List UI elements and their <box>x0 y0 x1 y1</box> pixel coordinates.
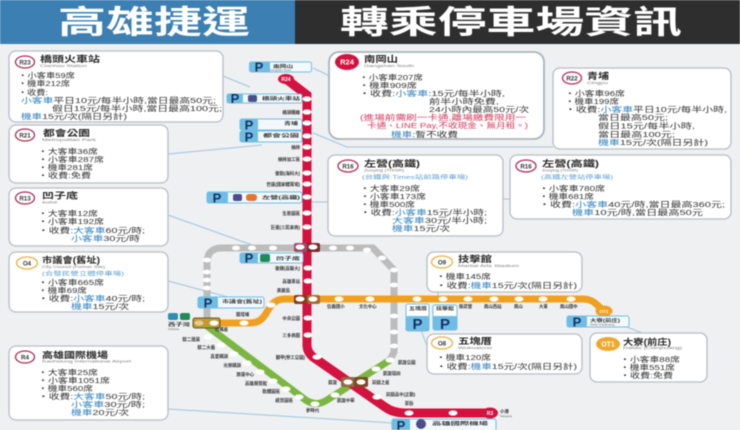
panel: OT1 大寮 <box>590 333 707 382</box>
panel: R16 左營 高鐵: (高鐵左營站停車場) <box>541 173 613 181</box>
panel: R4 高雄國際機場: ‧機車560席 <box>38 383 94 393</box>
orange line station labels: 鳳山 <box>514 303 523 310</box>
red line station labels: 前鎮高中(正勤) <box>386 391 416 398</box>
red line station labels: 三多商圈 <box>282 332 301 339</box>
panel: R23 橋頭火車站: 橋頭火車站 <box>40 53 100 64</box>
station tag: 橋頭火車站: P <box>231 91 240 106</box>
panel: O4 市議會: ‧小客車665席 <box>38 277 105 287</box>
panel: O4 市議會: 機車 15元/次 <box>71 301 130 311</box>
panel: R22 青埔: R22 <box>566 75 578 82</box>
panel: R21 都會公園: ‧收費:免費 <box>38 170 92 180</box>
panel: R23 橋頭火車站: 機車 15元/次(隔日另計) <box>21 111 128 121</box>
panel: R4 高雄國際機場: Kaohsiung International Airport <box>42 360 133 364</box>
panel: R22 青埔: Cingpu <box>587 81 608 85</box>
station tag: 左營(高鐵): P <box>213 190 222 206</box>
panel: O4 市議會: O4 <box>23 260 32 267</box>
station tag: 五塊厝 <box>406 304 429 333</box>
panel: R24 南岡山: 24小時內最高50元/次 <box>429 104 530 114</box>
panel: R16 左營 高鐵: ‧小客車780席 <box>539 183 606 193</box>
station tag: 大寮: P <box>573 314 582 330</box>
green line station labels: 凱旋瑞田 <box>383 370 401 377</box>
panel: O9 技擊館: ‧收費: 機車 15元/次(隔日另計) <box>436 280 578 290</box>
station tag: 技擊館: 技擊館 <box>436 305 455 312</box>
panel: R13 凹子底 <box>9 188 168 246</box>
panel: R24 南岡山: 機車 :暫不收費 <box>391 129 459 139</box>
panel: R16 左營 台鐵: (台鐵與:Times站前路停車場) <box>362 173 468 181</box>
panel: R22 青埔: 當日最高50元; <box>598 112 668 122</box>
station tag: 市議會: 市議會(舊址) <box>222 298 263 305</box>
panel: O9 技擊館 <box>427 252 582 292</box>
panel: R16 左營 台鐵: ‧小客車173席 <box>360 191 427 201</box>
green line station labels: 夢時代 <box>306 407 320 414</box>
orange line station labels: 大東 <box>539 303 548 310</box>
orange line station labels: 哈瑪星 <box>215 326 229 333</box>
panel: R16 左營 台鐵: 機車 15元/次 <box>392 223 451 233</box>
panel: R22 青埔: ‧機車199席 <box>565 96 620 106</box>
green circular line <box>203 323 390 404</box>
grey circular line <box>207 248 394 360</box>
red line station labels: 後勁(海科大) <box>275 170 301 177</box>
panel: R16 左營 台鐵: 左營(高鐵) <box>364 158 420 168</box>
station tag: 市議會 <box>198 296 264 310</box>
panel: R4 高雄國際機場: ‧收費: 大客車 50元/時; <box>38 391 145 401</box>
header: dark title band <box>295 0 740 44</box>
station tag: 大寮: 大寮(前庄) <box>590 317 621 324</box>
panel: OT1 大寮: 大寮(前庄) <box>623 336 671 347</box>
panel: R4 高雄國際機場: ‧大客車25席 <box>38 367 99 377</box>
station tag: 五塊厝: P <box>412 316 423 333</box>
orange line station labels: 鹽埕埔 <box>236 311 250 318</box>
panel: R24 南岡山: 卡通、LINE Pay,不收現金、無月租。) <box>367 120 529 130</box>
red line station labels: 中央公園 <box>282 315 301 322</box>
green line station labels: 凱旋中華 <box>337 397 355 404</box>
station tag: 大寮: Daliao (Cianjhuang) <box>590 322 615 326</box>
red line station labels <box>266 109 512 418</box>
red line station labels: Siaogang <box>500 414 512 418</box>
panel: R22 青埔: ‧收費: 小客車 平日10元/每半小時, <box>565 104 727 114</box>
icons and label: 西子灣 <box>168 313 191 331</box>
icons and label: 西子灣: Sizihwan <box>168 327 180 331</box>
red line station labels: 楠梓加工區 <box>278 156 301 163</box>
panel: R16 左營 高鐵: R16 <box>520 163 532 170</box>
panel: R23 橋頭火車站: 小客車 平日10元/每半小時,當日最高50元; <box>21 95 216 105</box>
green line station labels: 光榮碼頭 <box>223 362 242 369</box>
panel: R23 橋頭火車站: ‧收費: <box>18 87 48 97</box>
panel: R24 南岡山: R24 <box>340 58 355 66</box>
panel: OT1 大寮: ‧收費:免費 <box>620 370 674 380</box>
panel: R22 青埔: ‧小客車96席 <box>565 88 626 98</box>
red line stations: R24 <box>281 77 291 83</box>
station tag: 凹子底: 凹子底 <box>276 255 301 262</box>
red line station labels: 小港 <box>500 408 509 415</box>
station tag: 南岡山 <box>249 60 312 74</box>
panel: R16 左營 高鐵: ‧收費: 小客車 40元/時,當日最高360元; <box>539 199 725 209</box>
station tag: 技擊館: P <box>440 316 450 333</box>
panel: R16 左營 台鐵: ‧機車500席 <box>360 199 416 209</box>
green line station labels: 軟體園區 <box>262 388 281 395</box>
panel: O8 五塊厝: O8 <box>438 340 447 347</box>
green line station labels: 駁二大義 <box>197 344 216 351</box>
red line station labels: 後驛(高醫大) <box>275 265 301 272</box>
station tag: 橋頭火車站 <box>227 91 302 106</box>
orange line station labels: 信義國小 <box>327 303 345 310</box>
panel: R16 左營 高鐵: 機車 10元/時,當日最高50元 <box>572 207 704 217</box>
panel: OT1 大寮: OT1 <box>601 342 615 348</box>
panel: R13 凹子底: ‧大客車12席 <box>38 208 99 218</box>
orange line station labels: 鳳山西站 <box>484 303 502 310</box>
station tag: 大寮 <box>567 314 629 330</box>
orange line <box>203 299 604 323</box>
station tag: 凹子底: P <box>245 250 254 266</box>
panel: R21 都會公園: ‧大客車36席 <box>38 146 99 156</box>
header: blue title band: 高雄捷運 <box>58 4 250 40</box>
panel: OT1 大寮: ‧小客車88席 <box>620 354 681 364</box>
station tag: 青埔: 青埔 <box>284 120 299 127</box>
icons and label: 西子灣: 西子灣 <box>168 321 191 328</box>
interchange boxes <box>193 243 368 387</box>
red line station labels: 楠梓 <box>291 144 301 151</box>
panel: O9 技擊館: O9 <box>438 259 447 266</box>
panel: R16 左營 高鐵: Zuoying (TH/SR) <box>542 168 579 172</box>
orange line stations: OT1 <box>600 309 609 314</box>
orange line station labels: 鳳山國中 <box>560 303 578 310</box>
panel: O8 五塊厝: Wukuaicuo <box>458 346 492 350</box>
panel: O9 技擊館: ‧機車145席 <box>436 271 492 281</box>
panel: R24 南岡山: ‧小客車207席 <box>359 72 424 82</box>
panel: R23 橋頭火車站 <box>9 51 223 122</box>
panel: R16 左營 台鐵: 大客車 30元/半小時; <box>392 215 487 225</box>
orange line station labels <box>215 303 578 333</box>
grey line stations <box>203 246 398 348</box>
header: blue title band <box>0 0 295 44</box>
panel: R23 橋頭火車站: ‧機車212席 <box>18 78 70 88</box>
red line station labels: 獅甲(勞工公園) <box>276 354 306 361</box>
panel: R22 青埔 <box>553 68 731 149</box>
station tag: 南岡山: Gangshan South <box>270 68 291 72</box>
red line station labels: 世運(國家體育場) <box>266 181 301 188</box>
panel: R4 高雄國際機場: ‧小客車1051席 <box>38 375 111 385</box>
panel: R13 凹子底: ‧小客車192席 <box>38 216 105 226</box>
panel: O4 市議會: 市議會(舊址) <box>42 254 100 265</box>
green line station labels: 凱旋公園 <box>398 359 416 366</box>
panel: R16 左營 台鐵: ‧收費: 小客車 15元/半小時; <box>360 207 487 217</box>
panel: O4 市議會: ‧收費: 小客車 40元/時; <box>38 293 145 303</box>
panel: R21 都會公園: ‧小客車287席 <box>38 154 105 164</box>
station tag: 左營(高鐵): 左營(高鐵) <box>262 194 301 201</box>
station tag: 高雄國際機場 <box>392 418 496 430</box>
green line station labels <box>182 336 416 414</box>
green line station labels: 經貿園區 <box>275 397 294 404</box>
orange line station labels: 文化中心 <box>359 303 377 310</box>
red line station labels: 草衙 <box>405 400 414 407</box>
orange line stations <box>194 296 612 326</box>
panel: R4 高雄國際機場: 機車 20元/次 <box>71 407 130 417</box>
green line stations <box>204 334 394 407</box>
metro map <box>168 60 629 430</box>
green line station labels: 旅運中心 <box>236 371 255 378</box>
panel: O4 市議會: City Council (Former Site) <box>42 265 106 269</box>
panel: R4 高雄國際機場: 高雄國際機場 <box>42 349 108 360</box>
panel: R13 凹子底: Aozihdi <box>42 200 57 204</box>
green line station labels: 真愛碼頭 <box>210 353 229 360</box>
connector lines from cards to stations <box>168 68 642 423</box>
station tag: 高雄國際機場: 高雄國際機場 <box>432 420 489 427</box>
panel: R23 橋頭火車站: 假日15元/每半小時,當日最高100元; <box>52 103 222 113</box>
red line station labels: 高雄車站 <box>282 278 301 285</box>
panel: R13 凹子底: 小客車 30元/時 <box>71 233 141 243</box>
station tag: 青埔 <box>240 118 302 132</box>
station tag: 都會公園: 都會公園 <box>263 132 300 139</box>
panel: R21 都會公園: 都會公園 <box>43 127 90 138</box>
panel: R23 橋頭火車站: R23 <box>19 59 31 66</box>
panel: R4 高雄國際機場: 小客車 30元/時; <box>71 399 145 409</box>
red line station labels: 美麗島 <box>277 287 291 294</box>
panel: R4 高雄國際機場: R4 <box>21 354 30 361</box>
panel: R16 左營 台鐵: Zuoying (TH/SR) <box>364 168 405 172</box>
station tag: 凹子底 <box>240 250 303 266</box>
station tag: 青埔: P <box>245 118 254 132</box>
panel: O8 五塊厝: 五塊厝 <box>458 335 492 346</box>
panel: O8 五塊厝: ‧收費: 機車 15元/次(隔日另計) <box>436 361 578 371</box>
red line station labels: 橋頭糖廠 <box>282 109 301 116</box>
panel: R24 南岡山: ‧機車909席 <box>359 80 418 90</box>
station tag: 左營(高鐵) <box>207 190 302 206</box>
panel: R22 青埔: 假日15元/每半小時, <box>598 120 695 130</box>
panel: R24 南岡山: 南岡山 <box>364 53 398 64</box>
red line <box>286 79 490 413</box>
panel: R23 橋頭火車站: ‧小客車59席 <box>18 70 75 80</box>
panel: O4 市議會: ‧機車69席 <box>38 285 88 295</box>
panel: O9 技擊館: Martial Arts Stadium <box>458 264 519 268</box>
red line stations: R3 <box>487 411 493 417</box>
panel: R21 都會公園: R21 <box>19 132 31 139</box>
panel: R21 都會公園: Metropolitan Park <box>42 138 96 142</box>
station tag: 南岡山: P <box>255 60 264 74</box>
station tag: 市議會: P <box>204 296 213 310</box>
green line station labels: 駁二蓬萊 <box>182 336 201 343</box>
panel: R13 凹子底: 凹子底 <box>42 190 78 200</box>
red line stations <box>278 74 498 418</box>
panel: R13 凹子底: R13 <box>19 195 31 202</box>
panel: R13 凹子底: ‧收費: 大客車 60元/時; <box>38 225 145 235</box>
panel: O8 五塊厝 <box>427 334 582 374</box>
panel: R4 高雄國際機場 <box>9 346 168 420</box>
panel: R24 南岡山: Gangshan South <box>364 64 414 68</box>
panel: R16 左營 高鐵: 左營(高鐵) <box>542 158 599 168</box>
panel: OT1 大寮: Daliao (Cianjhuang) <box>623 346 683 350</box>
panel: R22 青埔: 機車 15元/次(隔日另計) <box>598 137 709 147</box>
panel: R16 左營 高鐵 <box>510 155 731 219</box>
red line station labels: 生態園區 <box>282 210 301 217</box>
panel: O9 技擊館: 技擊館 <box>458 253 492 264</box>
panel: R22 青埔: 青埔 <box>587 70 609 81</box>
panel: R24 南岡山 <box>329 52 544 139</box>
panel: O4 市議會: (合發民營立體停車場) <box>42 270 124 278</box>
station tag: 五塊厝: 五塊厝 <box>409 305 428 312</box>
red line station labels: 凱旋 <box>328 379 338 386</box>
station tag: 橋頭火車站: 橋頭火車站 <box>262 95 301 102</box>
panel: R24 南岡山: ‧收費: 小客車 :15元/每半小時, <box>359 88 505 98</box>
panel: R16 左營 台鐵 <box>328 155 503 236</box>
red line station labels: 巨蛋(三民家商) <box>271 224 301 231</box>
panel: R23 橋頭火車站: Cianhou Station <box>40 64 87 68</box>
panel: R21 都會公園: ‧機車281席 <box>38 162 94 172</box>
panel: R24 南岡山: (進場前需刷一卡通,離場繳費限用一 <box>360 112 527 122</box>
panel: O4 市議會 <box>9 252 168 312</box>
station tag: 都會公園: P <box>245 130 254 144</box>
panel: R16 左營 高鐵: ‧機車681席 <box>539 191 595 201</box>
station tag: 都會公園 <box>240 130 302 144</box>
panel: R24 南岡山: 前半小時免費, <box>429 96 499 106</box>
panel: OT1 大寮: ‧機車551席 <box>620 362 676 372</box>
panel: R22 青埔: 當日最高100元; <box>598 129 675 139</box>
green line station labels: 前鎮之星 <box>372 379 390 386</box>
panel: O8 五塊厝: ‧機車120席 <box>436 352 492 362</box>
header: dark title band: 轉乘停車場資訊 <box>340 4 682 40</box>
panel: R16 左營 台鐵: ‧大客車29席 <box>360 183 421 193</box>
panel: R16 左營 台鐵: R16 <box>342 163 354 170</box>
orange line station labels: 衛武營 <box>459 303 473 310</box>
green line station labels: 高雄展覽館 <box>245 380 268 387</box>
station tag: 南岡山: 南岡山 <box>273 63 293 70</box>
station tag: 技擊館 <box>433 305 457 333</box>
panel: R21 都會公園 <box>9 125 168 183</box>
